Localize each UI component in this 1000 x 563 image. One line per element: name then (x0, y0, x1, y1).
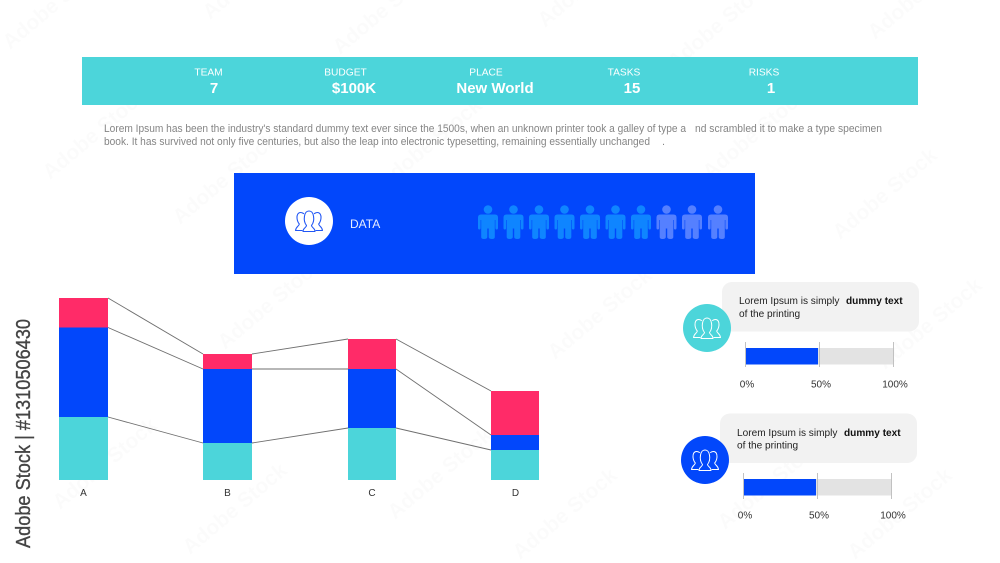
stat: risks: RISKS (749, 68, 779, 78)
intro paragraph: Lorem Ipsum has been the industry's standard dummy text ever since the 1500s, when an unknown printer took a galley of type a (104, 123, 687, 135)
icon: people in white circle (285, 197, 333, 245)
stat: risks (749, 68, 779, 97)
bar D: D (512, 488, 519, 499)
callout text card (720, 414, 917, 463)
callout text card: Lorem Ipsum is simply (737, 428, 838, 439)
text: Adobe Stock (843, 464, 957, 563)
icon: people in teal circle (683, 304, 731, 352)
text: Adobe Stock (383, 424, 497, 524)
progress scale labels (740, 380, 908, 390)
bar C: C (368, 488, 376, 499)
progress scale labels: 100% (882, 380, 908, 390)
connector lines (108, 298, 491, 450)
bar B (203, 354, 252, 499)
intro paragraph (104, 123, 882, 148)
header bar (82, 57, 918, 105)
stat: team: 7 (210, 80, 218, 97)
stock id side label: Adobe Stock | #1310506430 (12, 319, 35, 548)
progress scale labels: 0% (740, 380, 754, 390)
progress scale labels: 50% (811, 380, 831, 390)
stat: team (194, 68, 223, 97)
text: Adobe Stock (543, 264, 657, 364)
text: Adobe Stock (713, 434, 827, 534)
stat: tasks: 15 (624, 80, 640, 97)
progress bar (744, 473, 892, 499)
stat: tasks (608, 68, 641, 97)
text: Adobe Stock (168, 129, 282, 229)
stat: place: New World (456, 80, 534, 97)
progress scale labels: 50% (809, 510, 829, 522)
callout: metric one (683, 282, 919, 390)
text: Adobe Stock (828, 144, 942, 244)
callout text card: of the printing (739, 309, 800, 320)
callout text card (722, 282, 919, 332)
bar D (491, 391, 539, 499)
callout text card: dummy text (844, 428, 901, 439)
bar B: B (224, 488, 231, 499)
stat: tasks: TASKS (608, 68, 641, 78)
icon: people in blue circle (681, 436, 729, 484)
text: Adobe Stock (213, 254, 327, 354)
intro paragraph: nd scrambled it to make a type specimen (695, 123, 882, 135)
text: Adobe Stock (373, 94, 487, 194)
callout: metric two (681, 414, 917, 522)
stacked bar chart (59, 298, 539, 499)
text: Adobe Stock (38, 84, 152, 184)
stat: place: PLACE (469, 68, 503, 78)
stat: team: TEAM (194, 68, 223, 78)
progress scale labels: 100% (880, 510, 906, 522)
text: Adobe Stock (178, 459, 292, 559)
panel: data (234, 173, 755, 274)
intro paragraph: . (662, 136, 665, 148)
progress bar (746, 342, 894, 367)
bar A (59, 298, 108, 499)
text: Adobe Stock (48, 414, 162, 514)
stat: budget: $100K (332, 80, 376, 97)
progress scale labels (738, 510, 906, 522)
progress scale labels: 0% (738, 510, 752, 522)
callout text card: Lorem Ipsum is simply (739, 296, 840, 307)
callout text card: of the printing (737, 440, 798, 452)
text: Adobe Stock (873, 274, 987, 374)
stat: budget: BUDGET (324, 68, 367, 78)
stat: risks: 1 (767, 80, 775, 97)
text: Adobe Stock (508, 464, 622, 563)
stat: budget (324, 68, 376, 97)
pictogram row (478, 205, 728, 239)
text: Adobe Stock (698, 84, 812, 184)
callout text card: dummy text (846, 296, 903, 307)
label: data: DATA (350, 217, 380, 231)
bar A: A (80, 488, 87, 499)
intro paragraph: book. It has survived not only five centuries, but also the leap into electronic typesetting, remaining essentially unchanged (104, 136, 650, 148)
bar C (348, 339, 396, 499)
stat: place (456, 68, 534, 97)
